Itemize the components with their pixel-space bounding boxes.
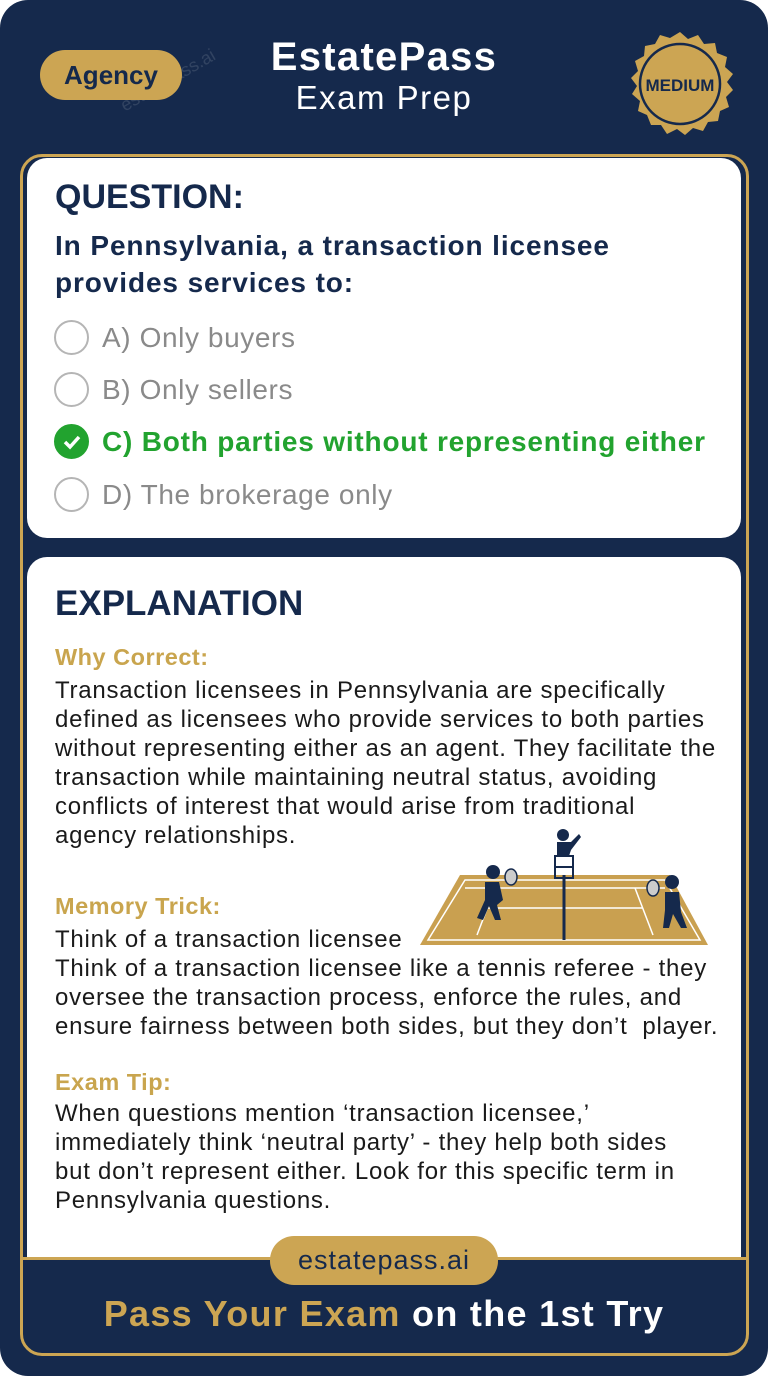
option C correct: C) Both parties without representing either [102, 426, 706, 456]
exam tip text: When questions mention ‘transaction licensee,’ [55, 1100, 590, 1127]
badge: MEDIUM seal [631, 32, 733, 135]
url pill: estatepass.ai [298, 1245, 470, 1275]
option A: A) Only buyers [102, 322, 296, 352]
why correct text: conflicts of interest that would arise from traditional [55, 793, 635, 820]
tagline: Pass Your Exam on the 1st Try [104, 1293, 664, 1334]
exam tip text: but don’t represent either. Look for this specific term in [55, 1158, 675, 1185]
memory trick text: Think of a transaction licensee [55, 926, 402, 953]
badge: MEDIUM seal: MEDIUM [646, 76, 714, 95]
option B: B) Only sellers [102, 374, 293, 404]
why correct text [55, 677, 716, 849]
title [271, 35, 497, 116]
memory trick text [55, 926, 718, 1040]
question text [55, 230, 610, 298]
panel: explanation [27, 557, 741, 1259]
why correct text: agency relationships. [55, 822, 296, 849]
url pill [270, 1236, 498, 1285]
question heading: QUESTION: [55, 178, 244, 216]
panel: question [27, 158, 741, 538]
why correct text: defined as licensees who provide services to both parties [55, 706, 705, 733]
explanation heading: EXPLANATION [55, 584, 303, 623]
illustration: tennis court [420, 829, 708, 945]
watermark: estatepass.ai [117, 45, 219, 115]
badge: Agency [40, 50, 182, 100]
why correct heading: Why Correct: [55, 644, 209, 670]
memory trick text: Think of a transaction licensee like a tennis referee - they [55, 955, 707, 982]
divider line [21, 1257, 748, 1260]
exam tip heading: Exam Tip: [55, 1069, 171, 1095]
why correct text: without representing either as an agent. They facilitate the [55, 735, 716, 762]
exam tip text: immediately think ‘neutral party’ - they help both sides [55, 1129, 667, 1156]
memory trick heading: Memory Trick: [55, 893, 221, 919]
memory trick text: oversee the transaction process, enforce the rules, and [55, 984, 682, 1011]
question text: provides services to: [55, 267, 354, 298]
badge: Agency: Agency [64, 60, 158, 90]
exam tip text [55, 1100, 675, 1214]
exam tip text: Pennsylvania questions. [55, 1187, 331, 1214]
why correct text: transaction while maintaining neutral status, avoiding [55, 764, 657, 791]
why correct text: Transaction licensees in Pennsylvania are specifically [55, 677, 666, 704]
title: EstatePass [271, 35, 497, 79]
memory trick text: ensure fairness between both sides, but they don’t player. [55, 1013, 718, 1040]
option D: D) The brokerage only [102, 478, 393, 510]
title: Exam Prep [296, 79, 472, 116]
question text: In Pennsylvania, a transaction licensee [55, 230, 610, 261]
